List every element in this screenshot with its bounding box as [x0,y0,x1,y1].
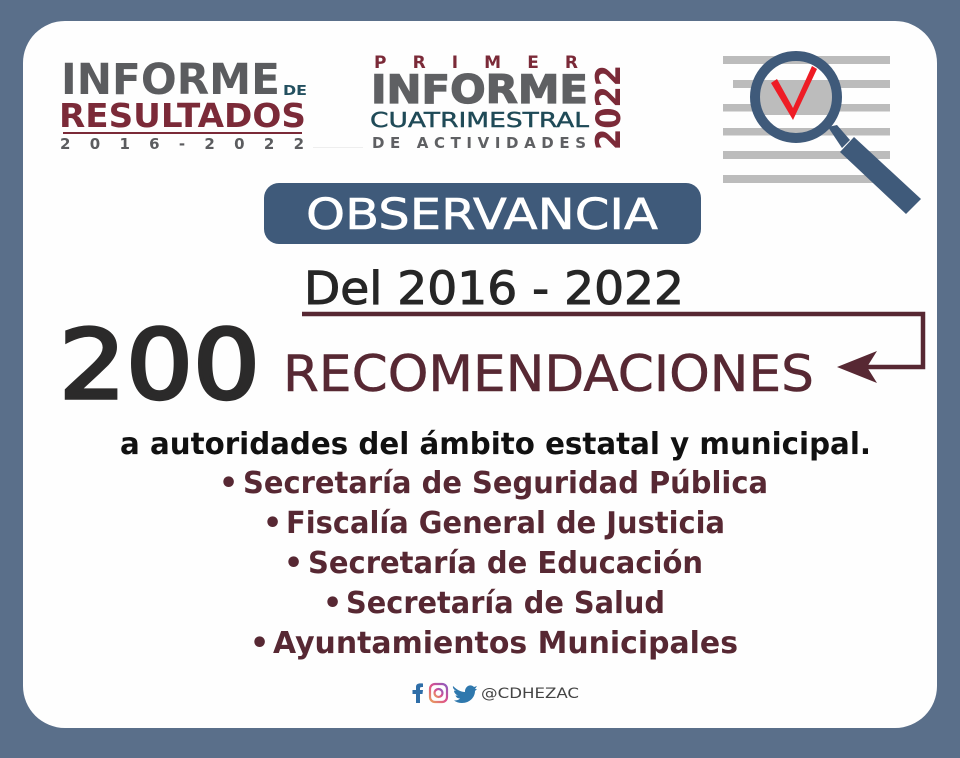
text block: recommendations list: Secretaría de Seguridad Pública [243,466,768,501]
text block: recommendations list [120,427,871,661]
text block: recommendations list: Ayuntamientos Municipales [273,626,738,661]
logo: Primer Informe Cuatrimestral: 2022 [589,65,629,150]
logo: Informe de Resultados [59,55,363,153]
text block: recommendations list: Secretaría de Educación [308,546,703,581]
heading: Observancia badge: OBSERVANCIA [306,190,659,240]
logo: Informe de Resultados: INFORME [61,55,280,105]
icon: instagram [430,684,447,702]
text block: recommendations list: • [263,506,282,541]
logo: Primer Informe Cuatrimestral [370,53,629,152]
text block: recommendations list: • [250,626,269,661]
text block: recommendations list: Secretaría de Salud [346,586,665,621]
icon: facebook [412,683,423,703]
icon: magnifying glass over document [723,56,921,214]
logo: Informe de Resultados: 2016-2022 [60,135,304,153]
text block: recommendations list: a autoridades del ámbito estatal y municipal. [120,427,871,462]
footer: social handles [412,683,579,703]
logo: Primer Informe Cuatrimestral: CUATRIMESTRAL [370,108,590,132]
logo: Primer Informe Cuatrimestral: INFORME [371,68,588,113]
logo: Primer Informe Cuatrimestral: PRIMER [374,53,578,73]
number: 200: 200 [59,311,260,421]
arrow: connector to recomendaciones [302,314,923,383]
text block: recommendations list: Fiscalía General de Justicia [286,506,725,541]
text block: recommendations list: • [219,466,238,501]
handle: @CDHEZAC [481,686,579,702]
heading: Observancia badge [264,183,701,244]
label: recomendaciones: RECOMENDACIONES [283,345,814,403]
text block: recommendations list: • [284,546,303,581]
logo: Informe de Resultados: DE [283,84,307,99]
date range: Del 2016 - 2022 [304,262,684,315]
logo: Primer Informe Cuatrimestral: DE ACTIVIDADES [372,134,586,152]
text block: recommendations list: • [323,586,342,621]
logo: Informe de Resultados: RESULTADOS [59,96,306,135]
icon: twitter [453,685,477,703]
